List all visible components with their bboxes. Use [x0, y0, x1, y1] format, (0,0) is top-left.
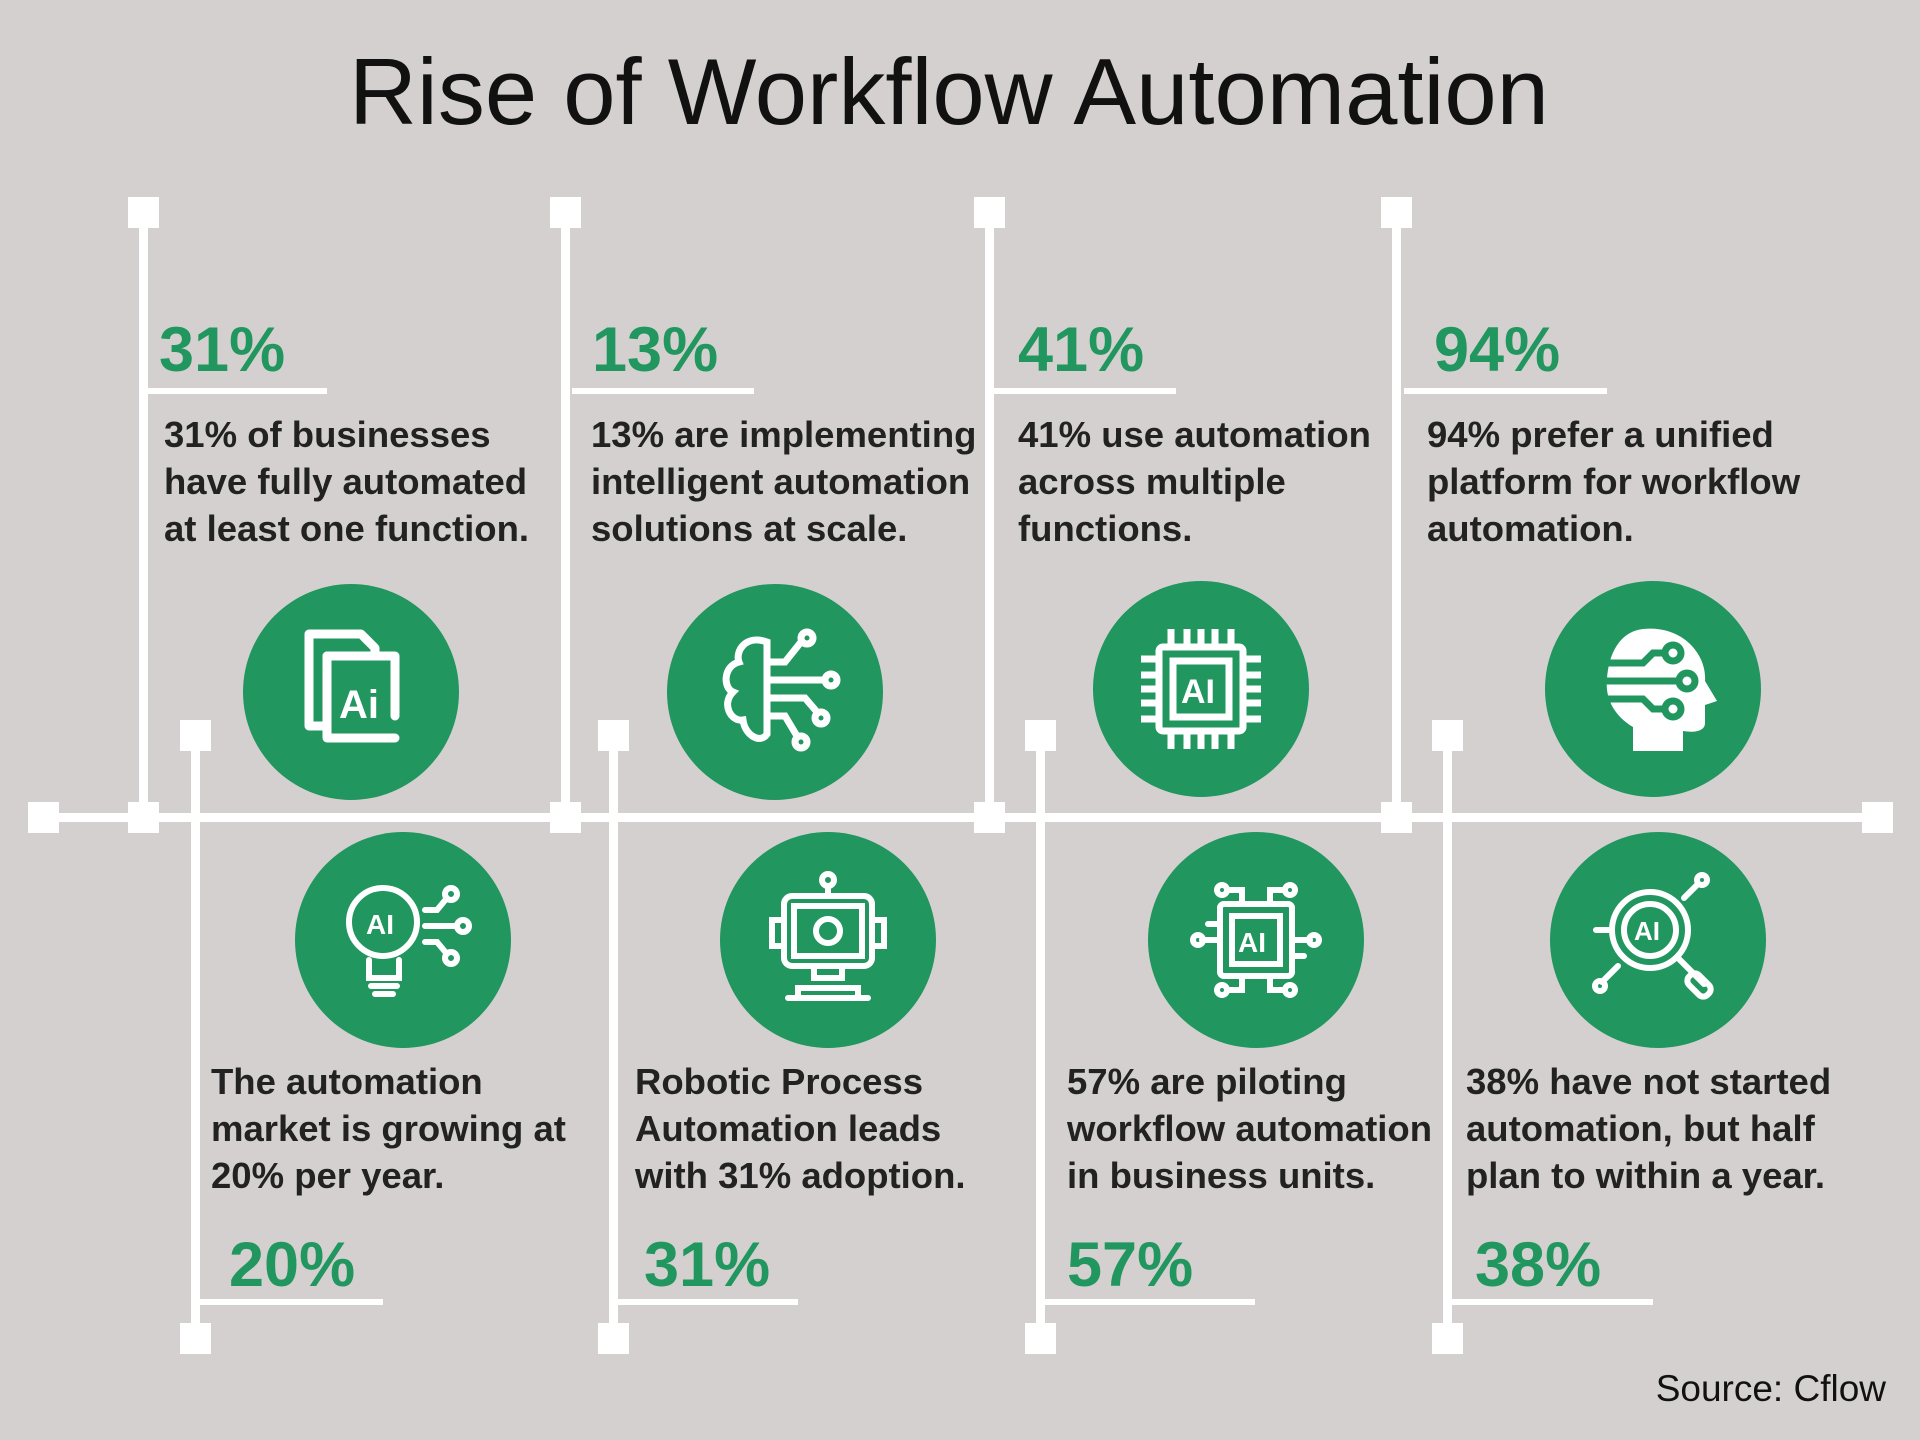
- stat 6 text: Automation leads: [635, 1108, 941, 1149]
- stat 4 text: 94% prefer a unified: [1427, 414, 1774, 455]
- icon: robot monitor: [720, 832, 936, 1048]
- stat 8 text: 38% have not started: [1466, 1061, 1831, 1102]
- stat 6 text: Robotic Process: [635, 1061, 923, 1102]
- stat 8 percent: 38%: [1475, 1230, 1601, 1300]
- icon: AI document: Ai: [339, 683, 379, 727]
- stat 5 text: [211, 1061, 566, 1196]
- stat 7 text: in business units.: [1067, 1155, 1375, 1196]
- title: Rise of Workflow Automation: [349, 39, 1549, 144]
- stat 4 percent: 94%: [1434, 315, 1560, 385]
- stat 5 text: 20% per year.: [211, 1155, 444, 1196]
- stat 5 text: The automation: [211, 1061, 483, 1102]
- stat 6 text: with 31% adoption.: [635, 1155, 966, 1196]
- icon: AI processor: AI: [1238, 927, 1266, 958]
- stat 3 text: [1018, 414, 1371, 549]
- icon: AI chip: AI: [1181, 673, 1215, 711]
- stat 8 text: automation, but half: [1466, 1108, 1815, 1149]
- icon: brain circuit: [667, 584, 883, 800]
- icon: head circuit: [1545, 581, 1761, 797]
- stat 3 text: functions.: [1018, 508, 1192, 549]
- stat 1 text: [164, 414, 529, 549]
- icon: AI magnifier: AI: [1634, 916, 1660, 946]
- stat 7 percent: 57%: [1067, 1230, 1193, 1300]
- stat 2 text: intelligent automation: [591, 461, 970, 502]
- stat 1 percent: 31%: [159, 315, 285, 385]
- icon: AI processor: [1148, 832, 1364, 1048]
- stat 3 percent: 41%: [1018, 315, 1144, 385]
- stat 5 percent: 20%: [229, 1230, 355, 1300]
- stat 8 text: [1466, 1061, 1831, 1196]
- stat 6 text: [634, 1061, 966, 1196]
- stat 3 text: across multiple: [1018, 461, 1286, 502]
- icon: AI chip: [1093, 581, 1309, 797]
- stat 4 text: [1427, 414, 1800, 549]
- stat 1 text: at least one function.: [164, 508, 529, 549]
- stat 2 text: [591, 414, 976, 549]
- icon: AI document: [243, 584, 459, 800]
- stat 1 text: have fully automated: [164, 461, 527, 502]
- stat 3 text: 41% use automation: [1018, 414, 1371, 455]
- stat 2 text: solutions at scale.: [591, 508, 907, 549]
- stat 2 percent: 13%: [592, 315, 718, 385]
- stat 2 text: 13% are implementing: [591, 414, 976, 455]
- stat 4 text: automation.: [1427, 508, 1634, 549]
- icon: AI lightbulb: [295, 832, 511, 1048]
- icon: AI lightbulb: AI: [366, 909, 394, 940]
- source: Source: Cflow: [1656, 1368, 1886, 1409]
- stat 6 percent: 31%: [644, 1230, 770, 1300]
- icon: AI magnifier: [1550, 832, 1766, 1048]
- stat 7 text: 57% are piloting: [1067, 1061, 1347, 1102]
- stat 4 text: platform for workflow: [1427, 461, 1800, 502]
- stat 7 text: workflow automation: [1067, 1108, 1432, 1149]
- stat 5 text: market is growing at: [211, 1108, 566, 1149]
- stat 7 text: [1066, 1061, 1432, 1196]
- stat 1 text: 31% of businesses: [164, 414, 491, 455]
- stat 8 text: plan to within a year.: [1466, 1155, 1825, 1196]
